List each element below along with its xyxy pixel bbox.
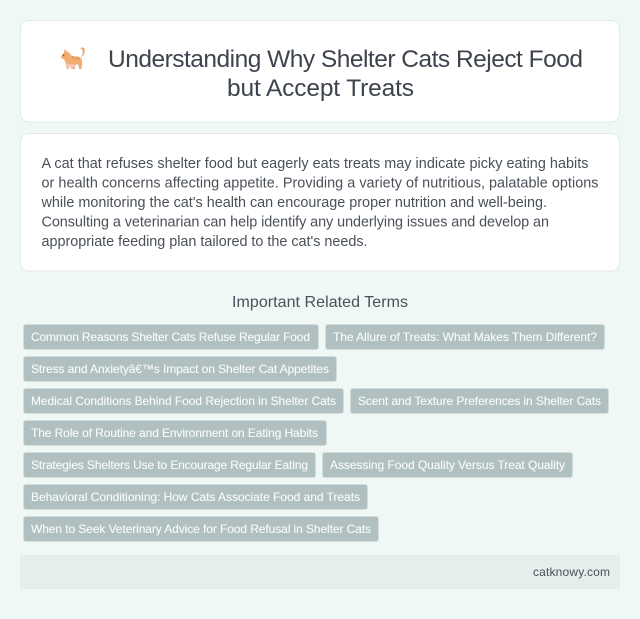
tag: common reasons xyxy=(24,324,318,350)
tag: behavioral conditioning xyxy=(24,484,368,510)
tag: stress and anxiety xyxy=(24,356,336,382)
tag: scent and texture xyxy=(350,388,608,414)
tag: veterinary advice: When to Seek Veterinary Advice for Food Refusal in Shelter Cats xyxy=(31,522,371,536)
tag: food quality: Assessing Food Quality Versus Treat Quality xyxy=(330,458,565,472)
title: Understanding Why Shelter Cats Reject Food xyxy=(108,46,583,73)
heading: related terms: Important Related Terms xyxy=(232,294,408,311)
text block: description: Consulting a veterinarian can help identify any underlying issues and develop an xyxy=(42,214,549,230)
tag: behavioral conditioning: Behavioral Conditioning: How Cats Associate Food and Treats xyxy=(31,490,360,504)
footer source text: catknowy.com xyxy=(533,565,610,579)
tag: routine and environment: The Role of Routine and Environment on Eating Habits xyxy=(31,426,318,440)
title: but Accept Treats xyxy=(227,75,414,102)
text block: description: or health concerns affecting appetite. Providing a variety of nutritious, palatable options xyxy=(42,176,598,192)
tag: stress and anxiety: Stress and Anxietyâ€™s Impact on Shelter Cat Appetites xyxy=(31,362,329,376)
text block: description: A cat that refuses shelter food but eagerly eats treats may indicate picky eating habits xyxy=(42,156,588,172)
panel: description xyxy=(20,134,620,271)
icon: cat xyxy=(61,47,85,69)
text block: description: appropriate feeding plan tailored to the cat's needs. xyxy=(42,234,368,250)
tag: medical conditions xyxy=(24,388,344,414)
tag: common reasons: Common Reasons Shelter Cats Refuse Regular Food xyxy=(31,330,310,344)
tag: veterinary advice xyxy=(24,516,378,542)
tag group: related terms xyxy=(24,324,608,542)
text block: description xyxy=(40,156,598,250)
panel: title card xyxy=(20,20,620,122)
text block: description: while monitoring the cat's health can encourage proper nutrition and well-being. xyxy=(40,195,547,211)
tag: strategies: Strategies Shelters Use to Encourage Regular Eating xyxy=(31,458,308,472)
tag: strategies xyxy=(24,452,316,478)
title xyxy=(108,46,583,102)
tag: medical conditions: Medical Conditions Behind Food Rejection in Shelter Cats xyxy=(31,394,336,408)
tag: allure of treats: The Allure of Treats: What Makes Them Different? xyxy=(333,330,597,344)
tag: food quality xyxy=(322,452,572,478)
footer xyxy=(20,555,620,589)
tag: allure of treats xyxy=(326,324,604,350)
tag: scent and texture: Scent and Texture Preferences in Shelter Cats xyxy=(358,394,601,408)
tag: routine and environment xyxy=(24,420,326,446)
